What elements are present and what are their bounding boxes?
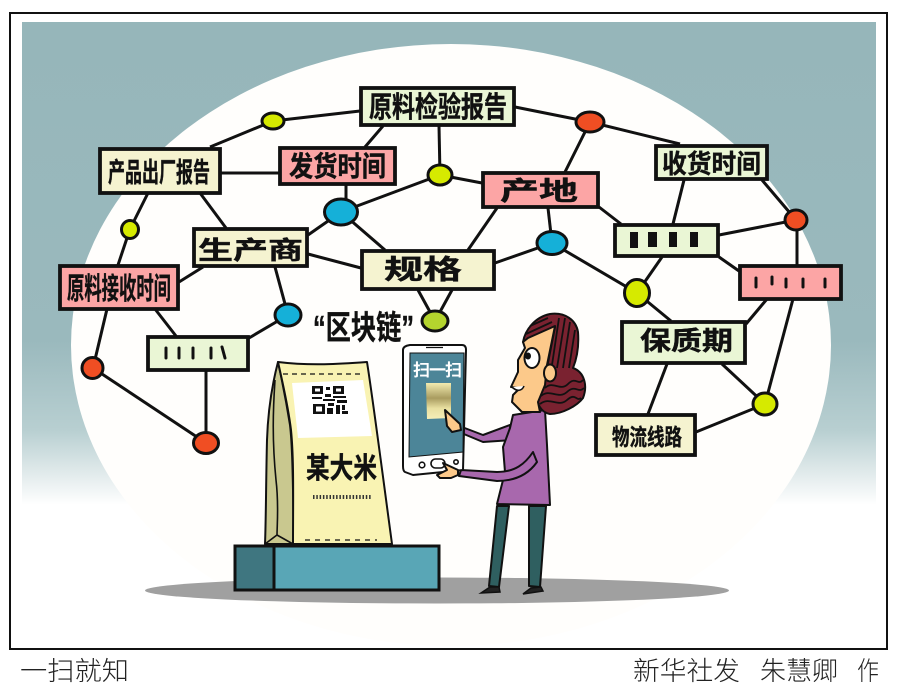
caption: credit: 作 (857, 656, 879, 686)
caption: title: 一扫就知 (20, 656, 129, 686)
label: shelf life (622, 322, 745, 363)
holding hand (437, 463, 458, 478)
label: green box lower left with marks (148, 337, 248, 370)
pedestal (235, 546, 439, 590)
bag white label (292, 380, 372, 438)
bag small print (313, 495, 372, 499)
caption: credit: 新华社发 (633, 656, 740, 686)
label: raw material receiving time (60, 266, 178, 309)
phone buttons (419, 459, 458, 468)
QR code (312, 386, 348, 414)
label: receiving time: 收货时间 (662, 149, 761, 179)
node: yellow lower right (753, 393, 777, 415)
white oval backdrop (71, 44, 831, 646)
hair (523, 314, 585, 414)
bag gusset (265, 362, 294, 544)
network connector lines (93, 107, 797, 443)
node: red far left (82, 358, 103, 378)
label: origin (483, 173, 598, 207)
rice bag (265, 362, 392, 544)
bag front (278, 362, 392, 544)
smartphone (403, 345, 466, 478)
label: pink box with marks (740, 266, 841, 299)
product name: 某大米 (306, 452, 377, 485)
pointing hand (445, 410, 461, 432)
label: specification: 规格 (384, 255, 462, 285)
torso (497, 410, 550, 505)
mouth (512, 386, 524, 390)
node: red top (576, 112, 604, 132)
label: logistics route: 物流线路 (612, 424, 682, 450)
far arm (459, 425, 512, 442)
ground shadow (145, 578, 729, 604)
network nodes (82, 112, 807, 454)
label: producer (194, 229, 307, 266)
caption: credit: 朱慧卿 (760, 656, 838, 686)
phone body (403, 345, 466, 475)
hair strands (526, 318, 584, 404)
label: shelf life: 保质期 (640, 326, 733, 356)
label: green box with bold marks (615, 225, 718, 256)
node: yellow left (122, 220, 138, 238)
label: factory report: 产品出厂报告 (108, 158, 210, 188)
heading: blockchain: “区块链” (313, 309, 414, 346)
caption: credit (633, 656, 879, 686)
node: red lower left (194, 432, 218, 454)
label: logistics route (596, 415, 695, 455)
eye (524, 348, 540, 368)
woman holding phone (459, 314, 585, 594)
node: blue left centre (324, 199, 358, 225)
label: shipping time: 发货时间 (289, 151, 386, 182)
node: yellow right (624, 280, 650, 306)
label: specification (362, 251, 494, 289)
label: producer: 生产商 (198, 237, 303, 265)
node: olive under specification box (422, 311, 448, 331)
ear (544, 364, 556, 382)
label: raw material receiving time: 原料接收时间 (67, 273, 171, 306)
label: factory report (100, 149, 220, 193)
node: yellow centre (428, 165, 452, 185)
label: origin: 产地 (500, 176, 578, 206)
label: raw material inspection report: 原料检验报告 (369, 91, 507, 124)
teal background panel (22, 22, 876, 510)
node: blue lower left (275, 304, 301, 326)
face (511, 326, 555, 412)
node: red far right (785, 210, 807, 230)
near arm (459, 452, 537, 481)
phone screen (409, 353, 464, 457)
node: blue right centre (537, 232, 567, 254)
node: yellow top left (262, 113, 284, 129)
phone screen title: 扫一扫 (413, 361, 462, 380)
shoes (481, 587, 543, 594)
legs (489, 506, 509, 587)
scan code on screen (426, 383, 451, 419)
